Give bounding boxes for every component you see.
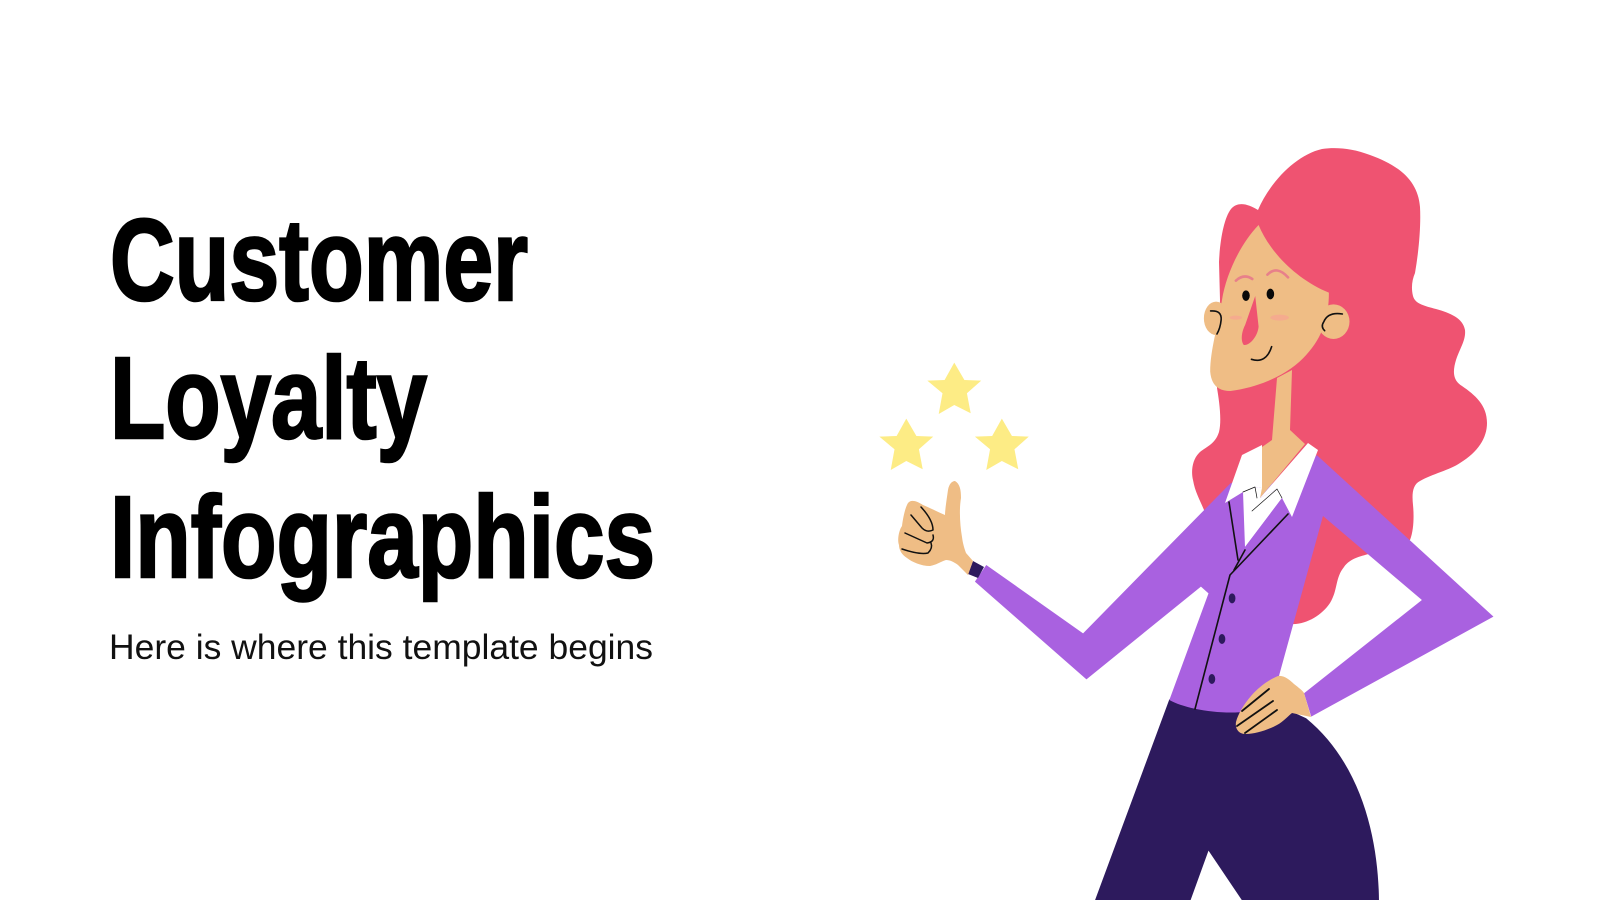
head <box>1204 225 1350 391</box>
eyebrows <box>1236 270 1288 281</box>
ear lines <box>1211 311 1342 334</box>
hair <box>1192 148 1487 624</box>
illustration: woman giving thumbs up <box>898 148 1493 900</box>
trousers <box>1095 699 1379 900</box>
subtitle: Here is where this template begins <box>109 628 653 667</box>
smile <box>1251 347 1272 360</box>
left collar <box>1225 445 1262 503</box>
neck <box>1260 370 1305 498</box>
title <box>110 195 655 602</box>
title: Loyalty <box>110 333 427 463</box>
hand on hip <box>1236 676 1311 734</box>
jacket lapel lines <box>1195 502 1288 709</box>
title: Customer <box>110 195 528 325</box>
nose <box>1242 296 1259 345</box>
left ear <box>1204 302 1228 335</box>
face <box>1210 225 1329 391</box>
cheeks <box>1230 315 1289 321</box>
title: Infographics <box>110 472 655 602</box>
shirt <box>1243 487 1282 547</box>
right collar <box>1260 443 1318 517</box>
thumbs up hand <box>898 481 973 575</box>
jacket <box>975 455 1493 717</box>
jacket buttons <box>1209 593 1235 684</box>
eyes <box>1242 289 1274 301</box>
cuff <box>968 561 984 578</box>
collar fold lines <box>1243 487 1282 511</box>
inner lapel <box>1237 498 1288 570</box>
stars <box>879 363 1029 470</box>
right ear <box>1318 304 1350 339</box>
